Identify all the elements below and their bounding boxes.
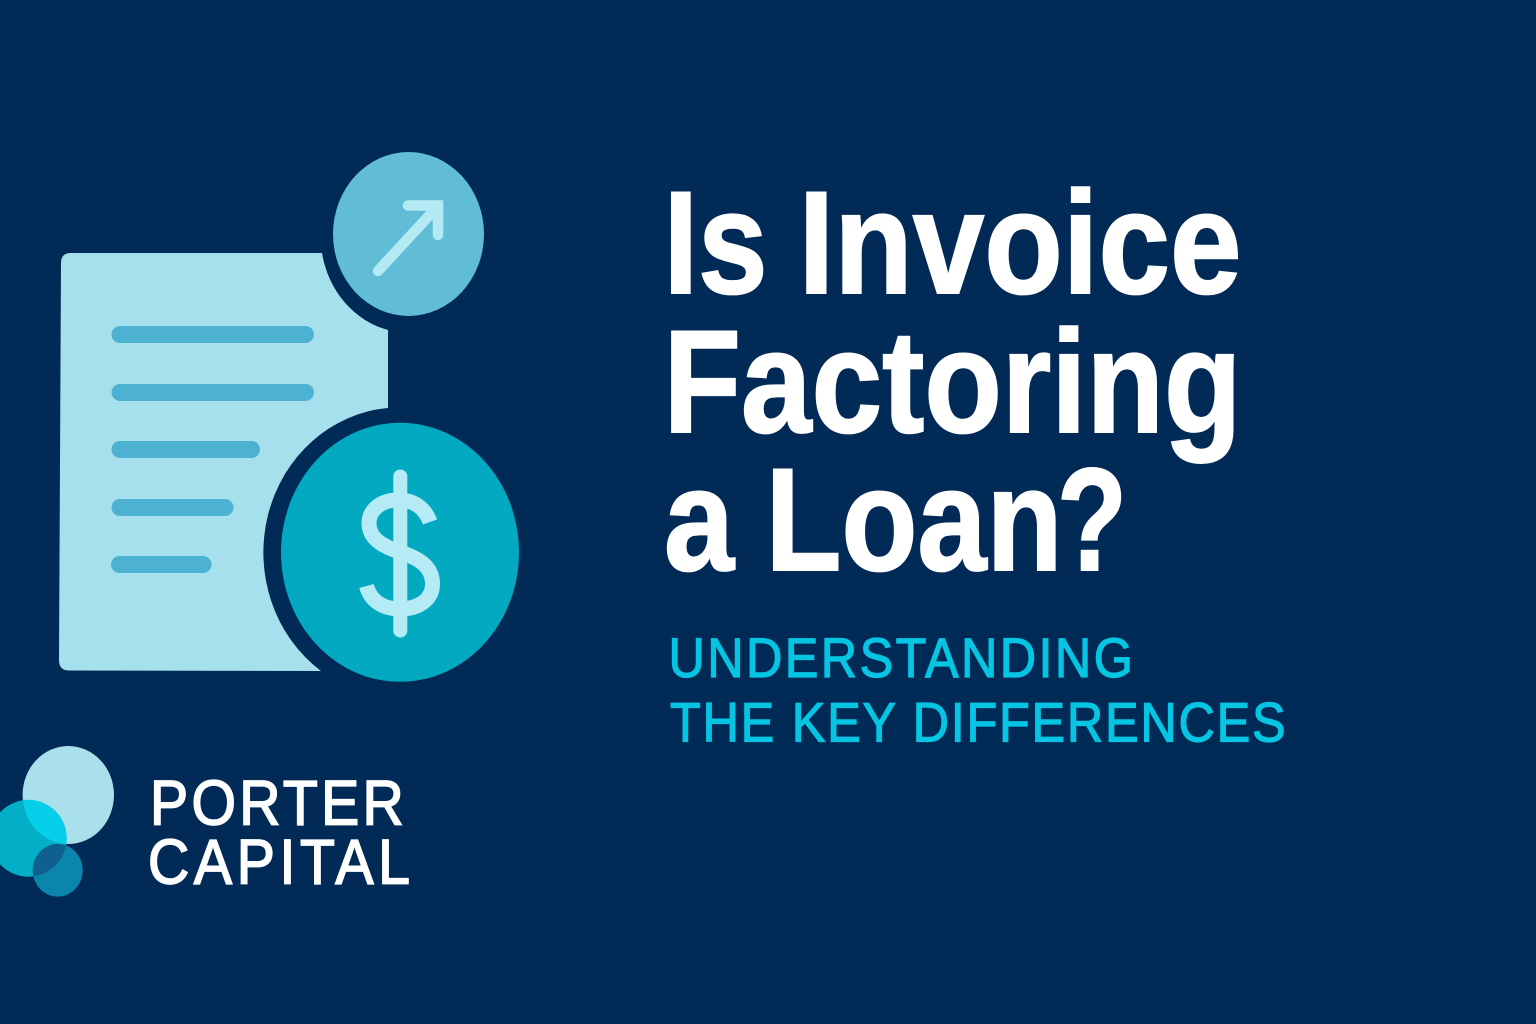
icon: invoice document: [59, 253, 388, 671]
logo wordmark: PORTER: [150, 767, 404, 838]
logo wordmark: [148, 767, 410, 897]
title: Is: [664, 161, 768, 324]
subtitle: THE KEY DIFFERENCES: [670, 692, 1286, 754]
dollar sign: [366, 476, 432, 630]
subtitle: UNDERSTANDING: [668, 628, 1133, 690]
logo mark: [0, 746, 114, 897]
title: a: [664, 438, 736, 601]
icon: dollar coin: [281, 423, 519, 682]
invoice text lines: [111, 326, 314, 573]
title: Factoring: [664, 300, 1242, 463]
title: ?: [1057, 438, 1127, 601]
title: Loan: [766, 438, 1062, 601]
title: [664, 161, 1242, 601]
logo wordmark: CAPITAL: [148, 826, 410, 897]
subtitle: [668, 628, 1286, 754]
title: Invoice: [798, 161, 1242, 324]
icon: growth arrow circle: [333, 152, 484, 316]
